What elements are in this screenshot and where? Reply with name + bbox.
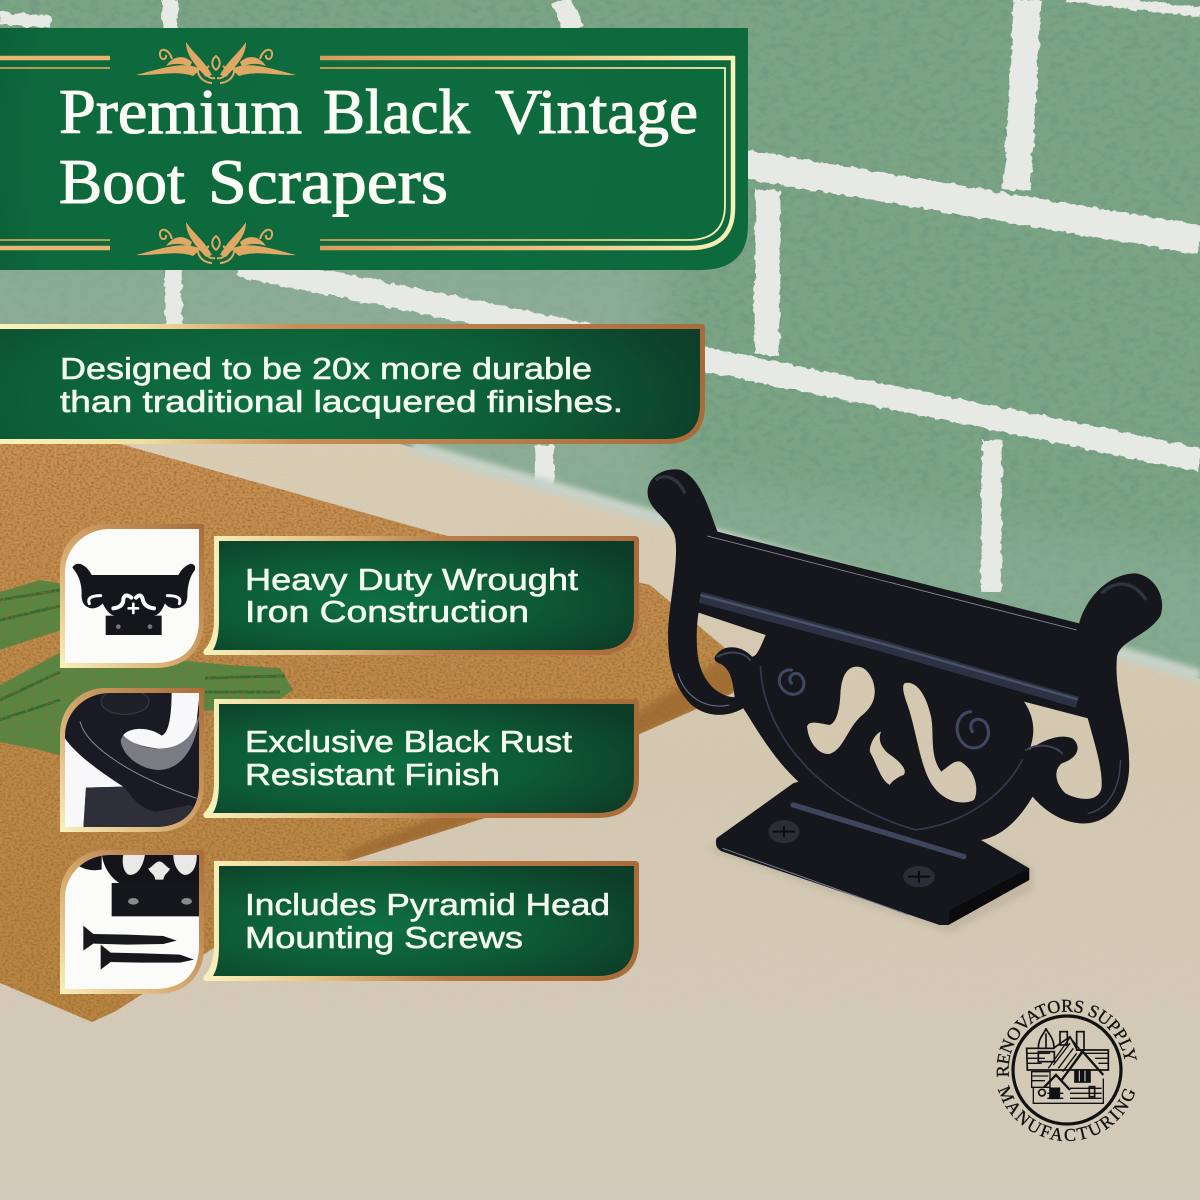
logo arc text top: RENOVATORS SUPPLY [996, 1000, 1137, 1077]
durability text: than traditional lacquered finishes. [60, 384, 623, 419]
title text: Boot [59, 146, 185, 217]
feature card: mounting screws [203, 861, 639, 981]
mat dark edge [345, 660, 745, 861]
feature card: wrought iron [203, 536, 639, 655]
logo arc text bottom: MANUFACTURING [998, 1084, 1135, 1142]
thumbnail: scraper front view [60, 524, 204, 668]
feature text: Heavy Duty Wrought [245, 562, 578, 597]
scroll work detail [717, 653, 1062, 830]
durability text: Designed to be 20x more durable [60, 351, 592, 386]
brand logo stamp [996, 1000, 1137, 1142]
logo house drawing [1027, 1028, 1108, 1103]
stone floor [120, 444, 1200, 788]
durability banner [0, 324, 705, 444]
title text: Vintage [495, 76, 698, 147]
title text: Premium [59, 76, 302, 147]
title text: Scrapers [208, 146, 448, 217]
brick wall background [0, 0, 1200, 720]
mounting plate detail [723, 805, 1029, 925]
thumbnail: black finish close-up [60, 685, 210, 835]
feature text: Iron Construction [245, 594, 529, 629]
title text: Black [323, 76, 470, 147]
cactus pattern [0, 580, 293, 762]
title banner [0, 28, 748, 270]
boot scraper product [648, 469, 1162, 933]
feature text: Resistant Finish [245, 757, 500, 792]
bottom ornament [136, 222, 296, 263]
top ornament [136, 42, 296, 83]
feature card: rust resistant finish [203, 699, 639, 818]
thumbnail: mounting screws [60, 850, 204, 994]
top bar detail [655, 477, 1146, 813]
feature text: Exclusive Black Rust [245, 724, 572, 759]
coir door mat with cactus [0, 410, 750, 1030]
gold frame lines [0, 58, 733, 248]
feature text: Mounting Screws [245, 920, 523, 955]
feature text: Includes Pyramid Head [245, 887, 610, 922]
